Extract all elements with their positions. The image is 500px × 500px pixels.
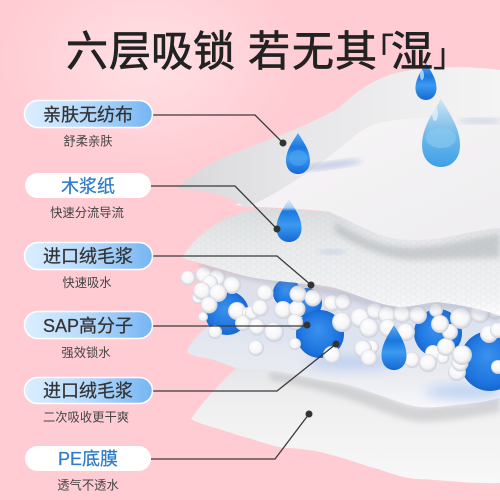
- icon: large droplet: [422, 99, 460, 167]
- layer: wood pulp paper: [235, 115, 500, 240]
- layer: second fluff pulp: [187, 300, 500, 407]
- label: 进口绒毛浆: 进口绒毛浆: [43, 246, 133, 266]
- label: 木浆纸: [25, 173, 151, 220]
- label: 木浆纸: 木浆纸: [61, 176, 115, 196]
- icon: top droplet: [416, 63, 436, 100]
- label: 亲肤无纺布: 亲肤无纺布: [43, 105, 133, 125]
- title: [66, 28, 465, 75]
- title: 锁: [193, 28, 235, 75]
- label: 进口绒毛浆 second: [24, 378, 152, 424]
- label: 进口绒毛浆: [24, 242, 152, 290]
- label: 进口绒毛浆: 快速吸水: [62, 276, 112, 290]
- layer: skin-friendly nonwoven: [177, 67, 500, 208]
- label: SAP高分子: SAP高分子: [43, 316, 133, 336]
- label: PE底膜: PE底膜: [58, 449, 118, 469]
- title: 吸: [151, 28, 193, 75]
- icon: translucent droplet: [276, 199, 302, 242]
- blue polymer spheres: [205, 279, 500, 391]
- white fluff balls: [180, 266, 500, 381]
- label: 进口绒毛浆 second: 进口绒毛浆: [43, 381, 133, 401]
- title: 湿: [391, 28, 433, 75]
- label: PE底膜: [25, 446, 151, 492]
- label: PE底膜: 透气不透水: [57, 478, 119, 492]
- title: 」: [433, 37, 465, 73]
- label: 亲肤无纺布: 舒柔亲肤: [63, 134, 113, 148]
- title: 层: [109, 28, 151, 75]
- layer: hexagon nonwoven: [182, 208, 500, 316]
- title: 其: [335, 28, 377, 75]
- title: 无: [292, 28, 334, 75]
- label: SAP高分子: [24, 312, 152, 360]
- title: 「: [362, 32, 394, 68]
- layer: SAP polymer spheres: [180, 266, 500, 391]
- label: 亲肤无纺布: [24, 100, 152, 148]
- label: 木浆纸: 快速分流导流: [50, 206, 124, 220]
- layer: PE film: [191, 360, 500, 483]
- leader lines and dots: [151, 115, 340, 459]
- label: SAP高分子: 强效锁水: [61, 345, 111, 360]
- title: 六: [66, 28, 108, 75]
- label: 进口绒毛浆 second: 二次吸收更干爽: [43, 410, 129, 424]
- icon: droplet among spheres: [382, 325, 406, 370]
- title: 若: [248, 28, 290, 75]
- icon: left droplet: [286, 133, 310, 174]
- lip shadow on spheres: [200, 262, 500, 322]
